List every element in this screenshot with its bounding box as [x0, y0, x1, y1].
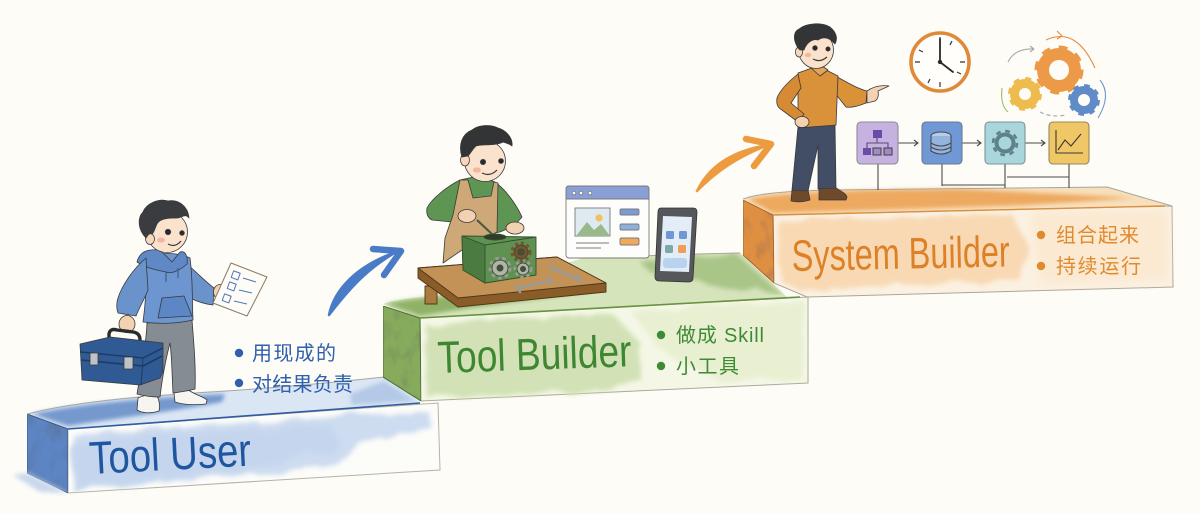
head	[464, 140, 506, 182]
picture placeholder	[575, 208, 610, 236]
label: Tool Builder: Tool Builder	[437, 325, 632, 383]
step front face	[773, 206, 1173, 297]
character: tool user with toolbox and checklist	[80, 200, 267, 413]
step front face	[420, 297, 808, 401]
clock	[911, 33, 969, 91]
node: chart	[1049, 122, 1089, 164]
step: System Builder	[743, 187, 1173, 297]
browser window	[566, 186, 649, 258]
character: system builder	[777, 24, 889, 202]
step front face	[68, 403, 440, 493]
shirt	[427, 176, 522, 240]
hair	[460, 126, 512, 157]
flow arrows	[898, 140, 1045, 146]
cycle arrows	[1002, 31, 1106, 118]
sweater torso	[798, 68, 838, 128]
hands	[867, 86, 889, 103]
label: System Builder: System Builder	[791, 227, 1010, 281]
head	[146, 212, 188, 252]
shoes	[791, 190, 810, 202]
step top face	[743, 187, 1172, 216]
arrow: orange	[697, 139, 771, 191]
step side face	[27, 414, 68, 493]
hair	[139, 200, 189, 238]
screwdriver	[477, 220, 494, 236]
left arm	[117, 258, 148, 316]
step side face	[383, 306, 421, 401]
apron	[443, 180, 498, 263]
workflow diagram	[857, 122, 1089, 190]
workbench with table	[418, 257, 606, 307]
green box with gears	[462, 234, 536, 283]
trousers	[137, 320, 195, 397]
trousers	[792, 125, 836, 191]
step side face	[743, 200, 774, 283]
step top face	[27, 377, 420, 429]
shoes	[137, 395, 160, 413]
hoodie torso	[143, 254, 193, 323]
arrow: blue	[329, 249, 401, 315]
hood	[137, 250, 187, 273]
step: Tool Builder	[383, 253, 808, 401]
hair	[794, 24, 836, 50]
bullet list: Tool User: 用现成的	[252, 342, 336, 365]
bullet list: Tool User: 对结果负责	[252, 373, 353, 396]
node: gear	[985, 122, 1025, 164]
character: tool builder	[427, 126, 524, 263]
step: Tool User	[13, 377, 440, 493]
connectors	[878, 164, 1069, 190]
bullet list: Tool User	[235, 342, 353, 396]
node: database	[922, 122, 962, 164]
label: Tool User: Tool User	[88, 424, 252, 484]
blue gear	[1070, 86, 1098, 114]
step top face	[383, 253, 787, 318]
node: hierarchy	[857, 122, 898, 164]
checklist	[213, 263, 267, 316]
bullet list: Tool Builder: 小工具	[676, 355, 739, 378]
gears cycle	[1002, 31, 1106, 118]
wrenches	[516, 266, 581, 292]
gears on box	[492, 260, 508, 276]
bullet list: System Builder	[1037, 224, 1141, 278]
toolbox	[109, 330, 140, 346]
head	[798, 32, 834, 68]
orange gear	[1037, 48, 1081, 92]
yellow gear	[1010, 79, 1040, 109]
right arm	[185, 262, 214, 305]
bullet list: System Builder: 持续运行	[1056, 255, 1141, 278]
left sleeve	[777, 74, 804, 122]
bullet list: Tool Builder	[657, 324, 764, 378]
bullet list: System Builder: 组合起来	[1056, 224, 1139, 247]
pocket	[158, 296, 192, 318]
bullet list: Tool Builder: 做成 Skill	[676, 324, 764, 347]
smartphone	[655, 208, 697, 282]
right sleeve	[830, 73, 867, 107]
